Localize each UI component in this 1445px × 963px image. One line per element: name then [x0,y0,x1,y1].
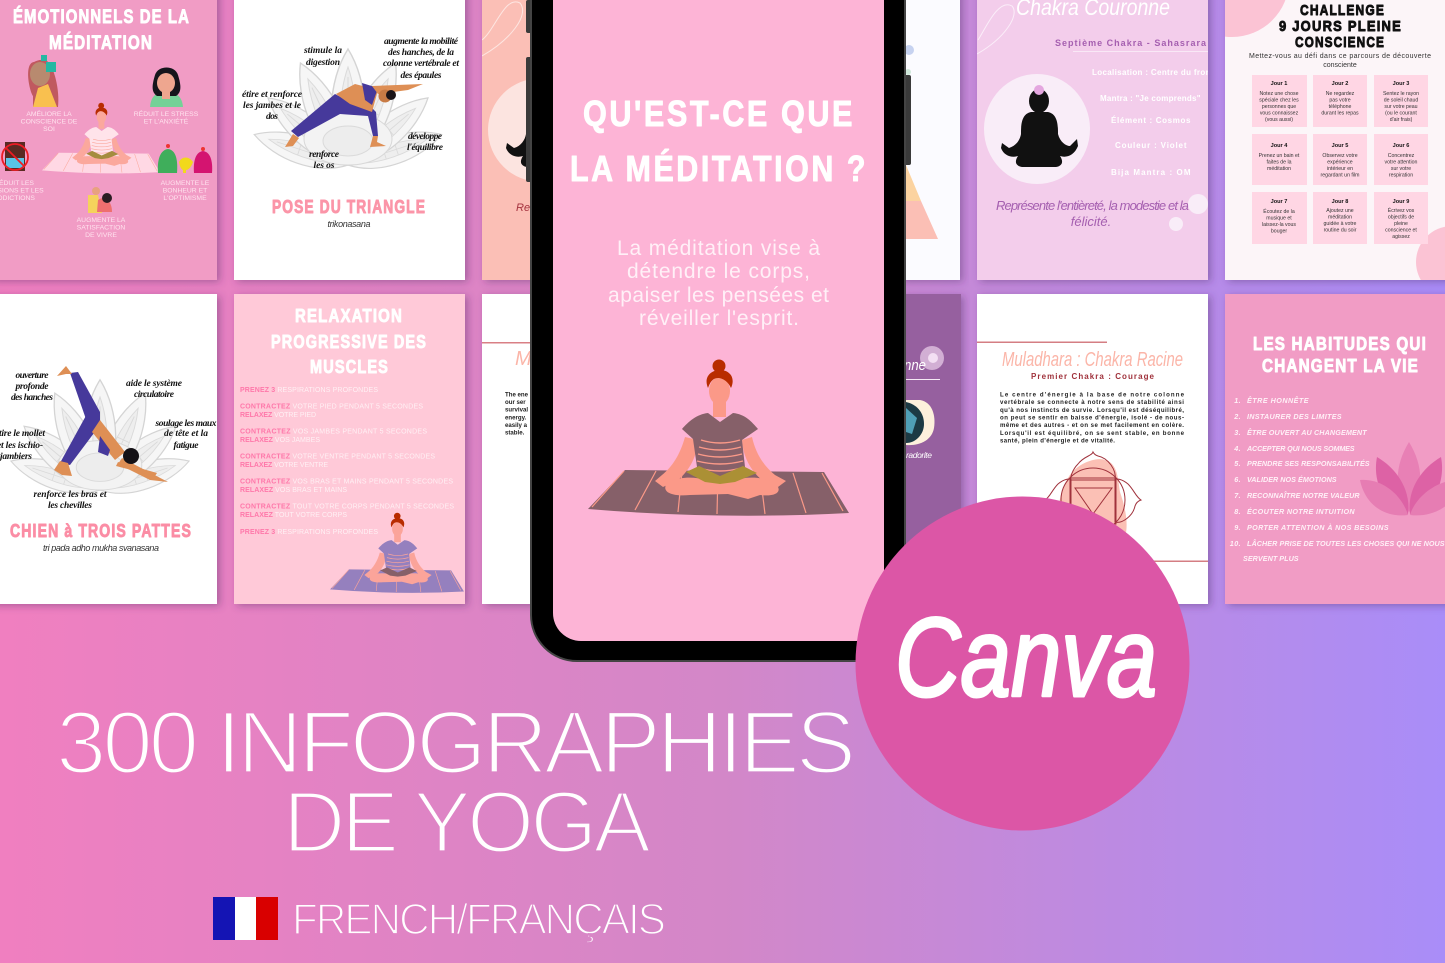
phone mockup [526,0,911,661]
intro text: consciente [1323,62,1357,69]
numbered list: PORTER ATTENTION À NOS BESOINS [1247,523,1389,532]
panel: three-legged dog [0,294,217,604]
numbered list: SERVENT PLUS [1243,554,1299,563]
numbered list: 9. [1234,523,1241,532]
annotations: benefits [0,371,217,511]
numbered list: ÊTRE HONNÊTE [1247,396,1309,405]
numbered list: ÉCOUTER NOTRE INTUITION [1247,507,1355,516]
day grid: (ou le courant [1385,110,1417,116]
heading: relaxation: MUSCLES [310,357,389,377]
icon: woman with flowers [28,55,58,107]
numbered list [1230,396,1445,563]
annotations: benefits: soulage les maux [154,419,217,429]
steps list: CONTRACTEZ VOS JAMBES PENDANT 5 SECONDES [240,428,427,436]
steps list: CONTRACTEZ TOUT VOTRE CORPS PENDANT 5 SECONDES [240,504,454,510]
numbered list: ÊTRE OUVERT AU CHANGEMENT [1247,428,1367,437]
steps list [240,387,454,536]
heading: pose du triangle: POSE DU TRIANGLE [272,197,426,217]
text: awareness: AMÉLIORE LA [26,111,72,118]
text: happiness: AUGMENTE LE [161,180,209,187]
steps list: CONTRACTEZ VOS BRAS ET MAINS PENDANT 5 SECONDES [240,478,453,486]
day grid: Écrivez vos [1388,208,1414,214]
numbered list: PRENDRE SES RESPONSABILITÉS [1247,459,1370,468]
day grid: musique et [1266,216,1292,222]
phone body text: La méditation vise à [617,237,820,260]
numbered list: 10. [1230,539,1241,548]
panel: partially hidden purple stone card [906,292,968,544]
cropped paragraph: survival [505,407,528,414]
day grid: Sentez le rayon [1383,91,1419,97]
heading: habits [1253,334,1427,376]
chakra facts: Bija Mantra : OM [1111,168,1191,177]
numbered list: 7. [1234,491,1241,500]
day grid: Notez une chose [1260,91,1298,97]
day grid: expérience [1327,160,1353,166]
paragraph: on peut se sentir en baisse d'énergie, isolé - de nous- [1000,414,1184,422]
annotations: benefits: développe [408,132,443,142]
day grid: laissez-la vous [1262,222,1296,228]
text: awareness: SOI [43,126,55,133]
numbered list: INSTAURER DES LIMITES [1247,412,1342,421]
steps list: RELAXEZ VOS JAMBES [240,437,320,444]
numbered list: 2. [1233,412,1241,421]
illustration: meditating woman [588,360,849,516]
chakra facts: Élément : Cosmos [1111,116,1191,125]
mandala flower [920,346,944,370]
day grid: personnes que [1262,104,1296,110]
numbered list: 1. [1234,396,1241,405]
day grid: méditation [1328,214,1352,220]
cropped paragraph: easily a [505,422,528,429]
heading: challenge [1279,2,1402,51]
phone body text: réveiller l'esprit. [639,307,799,330]
paragraph: même et des autres - et on se met facilement en colère. [1000,422,1184,429]
day grid: sur votre [1391,166,1411,172]
annotations: benefits: dos [266,112,278,122]
cropped paragraph: our ser [505,399,526,406]
paragraph: Le centre d'énergie à la base de notre colonne [1000,392,1185,398]
day grid: Jour 3 [1393,81,1409,87]
day grid: de soleil chaud [1384,98,1418,104]
steps list: RELAXEZ VOS BRAS ET MAINS [240,487,347,494]
chakra facts: Localisation : Centre du front [1092,68,1214,77]
icon: root chakra symbol [1045,452,1141,545]
annotations: benefits: digestion [306,58,340,68]
badge circle [856,496,1190,830]
panel: crown chakra [977,0,1214,280]
day grid: intérieur en [1327,166,1353,172]
annotations: benefits: les chevilles [48,501,92,511]
panel: partially hidden chakra card, peach [481,0,530,286]
annotations: benefits: renforce [309,150,340,160]
steps list: PRENEZ 3 RESPIRATIONS PROFONDES [240,529,378,536]
text: awareness: CONSCIENCE DE [21,118,78,125]
day grid: respiration [1389,172,1413,178]
text: stress: ET L'ANXIÉTÉ [144,116,189,125]
bottom rule [1100,560,1208,562]
icon: lotus [1360,442,1445,515]
subheading: Premier Chakra : Courage [1031,372,1155,381]
day grid: votre attention [1385,160,1418,166]
heading: habits: CHANGENT LA VIE [1262,356,1419,376]
annotations: benefits: jambiers [0,452,32,462]
day grid: faites de la [1266,160,1292,166]
canva badge [856,496,1190,830]
mandala lotus backdrop [7,380,193,503]
intro text: Mettez-vous au défi dans ce parcours de découverte [1249,53,1431,60]
heading: emotional benefits [13,6,190,54]
day grid: spéciale chez les [1259,98,1299,104]
annotations: benefits [242,37,459,171]
caption: radorite [906,450,932,460]
subheading: Septième Chakra - Sahasrara [1055,38,1207,48]
steps list: CONTRACTEZ VOTRE PIED PENDANT 5 SECONDES [240,404,423,410]
numbered list: VALIDER NOS ÉMOTIONS [1247,475,1337,484]
text: happiness: BONHEUR ET [163,187,207,194]
day grid: vous connaissez [1260,110,1299,116]
day grid: pleine [1394,221,1408,227]
day grid: Concentrez [1388,153,1414,159]
annotations: benefits: de tête et la [164,429,208,439]
chakra facts: Mantra : "Je comprends" [1100,94,1201,103]
steps list: RELAXEZ VOTRE VENTRE [240,462,328,469]
phone heading: LA MÉDITATION ? [570,148,868,189]
rule [1073,51,1208,52]
decorative dots [1169,194,1208,231]
annotations: benefits: des hanches, de la [388,48,454,58]
paragraph: qu'à nos instincts de survie. Lorsqu'il est déséquilibré, [1000,407,1184,414]
annotations: benefits: renforce les bras et [34,490,107,500]
sanskrit name: tri pada adho mukha svanasana [43,543,159,553]
annotations: benefits: aide le système [126,379,183,389]
title: 300 infographies de yoga [56,692,853,871]
day grid: téléphone [1329,104,1352,110]
heading: relaxation: PROGRESSIVE DES [271,332,427,352]
day grid: pas votre [1329,98,1351,104]
day grid [1252,75,1428,244]
steps list: CONTRACTEZ VOTRE VENTRE PENDANT 5 SECONDES [240,454,435,460]
panel: triangle pose [234,0,465,280]
day grid: Prenez un bain et [1259,153,1299,159]
day grid: durant les repas [1321,110,1359,116]
paragraph: Lorsqu'il est équilibré, on se sent stable, en bonne [1000,430,1185,437]
chakra facts: Couleur : Violet [1115,141,1187,150]
corner blobs [1175,0,1445,298]
annotations: benefits: les os [314,161,335,171]
decorative curl [977,5,1014,54]
icon: happy monsters [158,144,212,173]
heading: challenge: CONSCIENCE [1295,34,1385,51]
heading: challenge: 9 JOURS PLEINE [1279,18,1402,35]
day grid: Jour 8 [1332,199,1348,205]
heading: emotional benefits: ÉMOTIONNELS DE LA [13,6,190,28]
phone body text: apaiser les pensées et [608,284,829,307]
title: 300 infographies de yoga: 300 INFOGRAPHIES [56,692,853,792]
icon: chocolate with no sign [2,142,28,171]
decorative curl [482,2,523,56]
annotations: benefits: les jambes et le [243,101,302,111]
panel: partially hidden pyramid card [900,0,960,280]
steps list: RELAXEZ VOTRE PIED [240,412,316,419]
day grid: bouger [1271,228,1287,234]
day grid: Jour 5 [1332,143,1348,149]
heading: challenge: CHALLENGE [1300,2,1385,19]
day grid: sur votre peau [1384,104,1418,110]
day grid: regardant un film [1321,172,1359,178]
illustration: down dog [54,366,168,482]
cropped heading: nne [904,357,926,374]
heading: relaxation: RELAXATION [295,306,403,326]
day grid: (vous aussi) [1265,117,1293,123]
numbered list: 8. [1234,507,1241,516]
annotations: benefits: ouverture [16,371,49,381]
day grid: Écoutez de la [1263,209,1295,215]
annotations: benefits: circulatoire [134,390,175,400]
phone heading [570,93,868,189]
day grid: Ne regardez [1326,91,1354,97]
day grid: d'air frais) [1390,117,1413,123]
heading: relaxation [271,306,427,377]
icon: stressed woman [150,68,183,107]
numbered list: LÂCHER PRISE DE TOUTES LES CHOSES QUI NE NOUS [1247,539,1445,548]
cropped paragraph: The ene [505,392,528,398]
steps list: RELAXEZ TOUT VOTRE CORPS [240,512,347,519]
annotations: benefits: des épaules [400,71,442,81]
phone heading: QU'EST-CE QUE [583,93,855,134]
day grid: objectifs de [1388,214,1414,220]
blob with silhouette [488,80,526,180]
numbered list: 6. [1234,475,1241,484]
language label: FRENCH/FRANÇAIS [292,895,665,944]
numbered list: RECONNAÎTRE NOTRE VALEUR [1247,491,1360,500]
title: 300 infographies de yoga: DE YOGA [283,774,651,871]
phone body text: détendre le corps, [627,260,810,283]
cropped caption: Re [516,202,530,214]
paragraph: vertébrale se connecte à notre sens de stabilité ainsi [1000,399,1184,406]
annotations: benefits: profonde [14,382,49,392]
day grid: Jour 9 [1393,199,1409,205]
day grid: Jour 1 [1271,81,1287,87]
blob with silhouette [984,74,1090,184]
pyramid segments [906,165,938,239]
text: life satisfaction: DE VIVRE [85,232,117,239]
sanskrit name: trikonasana [328,219,370,229]
phone side buttons [526,0,911,182]
cropped paragraph: stable. [505,430,525,436]
day grid: agissez [1392,234,1410,240]
stone [906,400,934,445]
heading: chien a trois pattes: CHIEN à TROIS PATTES [10,521,192,541]
annotations: benefits: des hanches [11,393,53,403]
annotations: benefits: fatigue [174,441,199,451]
intro text [1249,53,1431,69]
language row [213,895,665,944]
steps list: PRENEZ 3 RESPIRATIONS PROFONDES [240,387,378,394]
heading: muladhara: Muladhara : Chakra Racine [1002,349,1183,371]
caption: Représente l'entièreté, la modestie et la [996,198,1189,213]
heading: emotional benefits: MÉDITATION [49,32,153,54]
annotations: benefits: augmente la mobilité [384,37,459,47]
small icons [904,45,914,75]
icon: couple [88,187,112,213]
top rule [977,342,1107,343]
illustration: triangle pose [285,83,423,147]
day grid: méditation [1267,166,1291,172]
cropped paragraph: energy. [505,414,527,421]
caption [996,198,1189,229]
panel: emotional benefits of meditation [0,0,217,280]
panel: life changing habits [1225,294,1445,604]
day grid: Ajoutez une [1326,208,1354,214]
panel: muladhara root chakra [977,294,1208,604]
annotations: benefits: colonne vertébrale et [383,59,459,69]
annotations: benefits: l'équilibre [407,143,444,153]
day grid: guidée à votre [1324,221,1357,227]
cropped heading: M [515,348,532,370]
day grid: Jour 2 [1332,81,1348,87]
day grid: Jour 6 [1393,143,1409,149]
chakra facts [1092,68,1214,177]
numbered list: 5. [1234,459,1241,468]
text: life satisfaction: SATISFACTION [77,224,125,231]
panel: partially hidden english muladhara card [482,294,542,604]
annotations: benefits: étire et renforce [242,90,303,100]
day grid: Jour 7 [1271,199,1287,205]
day grid: Jour 4 [1271,143,1288,149]
illustration: meditating woman, purple [330,513,464,593]
day grid: routine du soir [1324,228,1357,234]
paragraph: santé, plein d'énergie et de vitalité. [1000,438,1115,444]
icon: french flag [213,897,278,940]
text: life satisfaction: AUGMENTE LA [77,217,125,224]
phone body [531,0,905,661]
caption: félicité. [1071,214,1111,229]
day grid: Observez votre [1322,153,1358,159]
numbered list: ACCEPTER QUI NOUS SOMMES [1246,444,1355,453]
numbered list: 4. [1233,444,1241,453]
phone body text [608,237,829,330]
numbered list: 3. [1234,428,1241,437]
canva wordmark: Canva [895,595,1157,720]
rule [906,379,940,380]
mandala lotus backdrop [250,49,446,178]
text: happiness: L'OPTIMISME [163,195,207,202]
panel: progressive muscle relaxation [234,294,465,604]
text: stress: RÉDUIT LE STRESS [134,111,198,118]
illustration: meditating woman, light [42,103,160,173]
annotations: benefits: stimule la [303,46,342,56]
phone screen [553,0,884,641]
day grid: conscience et [1385,228,1417,234]
panel: nine day challenge [1175,0,1445,298]
paragraph [1000,392,1185,444]
rule [482,342,532,344]
